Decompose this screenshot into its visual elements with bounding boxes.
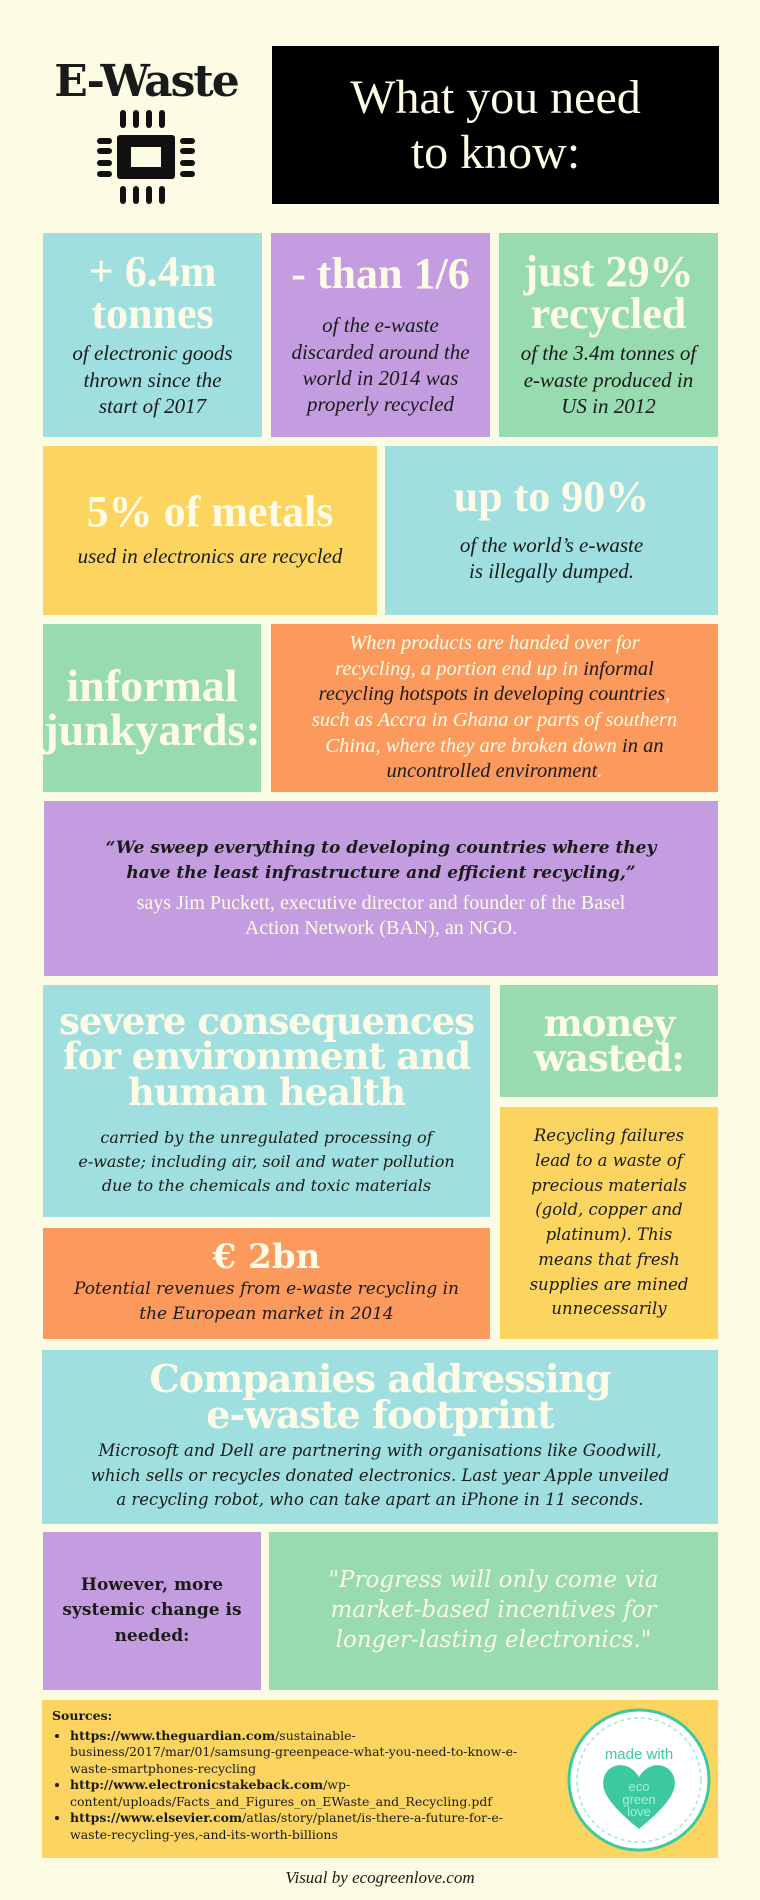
- heading: What you need to know: to know:: [411, 126, 580, 179]
- panel: just 29% recycled: e-waste produced in: [524, 368, 693, 392]
- panel: 6.4m tonnes: + 6.4m: [89, 247, 216, 296]
- panel: 5% of metals: [43, 446, 377, 615]
- logo: made with ecogreenlove: love: [627, 1804, 651, 1819]
- panel: up to 90%: [385, 446, 718, 615]
- logo: made with ecogreenlove: made with: [605, 1746, 673, 1763]
- panel: severe consequences: human health: [128, 1070, 405, 1114]
- panel: recycling failures: [500, 1107, 718, 1339]
- panel: informal junkyards text: China, where they are broken down in an: [325, 735, 664, 757]
- panel: informal junkyards text: such as Accra in Ghana or parts of southern: [312, 709, 677, 731]
- panel: companies addressing e-waste: a recycling robot, who can take apart an iPhone in 11 seconds.: [116, 1490, 644, 1509]
- panel: 2bn revenues: the European market in 2014: [139, 1304, 394, 1324]
- panel: just 29% recycled: recycled: [531, 289, 686, 338]
- panel: systemic change: However, more: [81, 1575, 223, 1595]
- panel: money wasted heading: wasted:: [534, 1036, 684, 1080]
- panel: companies addressing e-waste: Microsoft and Dell are partnering with organisations like Goodwill,: [98, 1441, 662, 1460]
- panel: Jim Puckett quote: says Jim Puckett, executive director and founder of the Basel: [137, 892, 625, 914]
- heading: What you need to know: What you need: [350, 71, 641, 124]
- panel: severe consequences: severe consequences: [59, 999, 474, 1043]
- panel: 6.4m tonnes: start of 2017: [99, 394, 206, 418]
- panel: informal junkyards text: When products are handed over for: [349, 632, 640, 654]
- panel: just 29% recycled: US in 2012: [561, 394, 656, 418]
- panel: progress quote: [269, 1532, 718, 1690]
- panel: just 29% recycled: [499, 233, 718, 437]
- panel: informal junkyards heading: informal: [66, 660, 238, 711]
- panel: informal junkyards text: uncontrolled environment.: [387, 760, 602, 782]
- panel: recycling failures: lead to a waste of: [535, 1151, 683, 1170]
- panel: companies addressing e-waste: e-waste footprint: [206, 1392, 554, 1437]
- logo: made with ecogreenlove: eco: [629, 1779, 649, 1794]
- footer credit: Visual by ecogreenlove.com: [285, 1868, 475, 1887]
- panel: companies addressing e-waste: which sells or recycles donated electronics. Last year Apple unveiled: [91, 1466, 669, 1485]
- panel: less than 1/6: of the e-waste: [322, 313, 439, 337]
- panel: 6.4m tonnes: tonnes: [91, 289, 214, 338]
- panel: 2bn revenues: € 2bn: [213, 1237, 320, 1277]
- panel: Jim Puckett quote: [44, 801, 718, 976]
- panel: 6.4m tonnes: [43, 233, 262, 437]
- panel: recycling failures: means that fresh: [538, 1250, 680, 1269]
- panel: progress quote: longer-lasting electronics.": [336, 1627, 651, 1653]
- panel: severe consequences: e-waste; including air, soil and water pollution: [78, 1152, 455, 1171]
- panel: less than 1/6: discarded around the: [291, 340, 470, 364]
- panel: progress quote: "Progress will only come via: [328, 1567, 659, 1593]
- icon: microchip: [97, 110, 195, 204]
- panel: informal junkyards text: [271, 624, 718, 792]
- panel: Jim Puckett quote: Action Network (BAN), an NGO.: [245, 917, 517, 939]
- panel: 5% of metals: used in electronics are recycled: [78, 544, 342, 568]
- panel: systemic change: systemic change is: [62, 1600, 242, 1620]
- panel: recycling failures: (gold, copper and: [535, 1200, 683, 1219]
- panel: up to 90%: up to 90%: [454, 472, 649, 521]
- logo: made with ecogreenlove: [568, 1708, 710, 1852]
- panel: 2bn revenues: Potential revenues from e-waste recycling in: [74, 1279, 459, 1299]
- panel: informal junkyards text: recycling hotspots in developing countries,: [319, 683, 670, 705]
- panel: less than 1/6: [271, 233, 490, 437]
- panel: money wasted heading: money: [544, 1001, 674, 1045]
- panel: up to 90%: of the world’s e-waste: [460, 533, 643, 557]
- panel: companies addressing e-waste: Companies addressing: [149, 1356, 611, 1401]
- panel: systemic change: needed:: [115, 1626, 189, 1646]
- panel: severe consequences: for environment and: [63, 1034, 470, 1078]
- panel: severe consequences: [43, 985, 490, 1217]
- panel: 5% of metals: 5% of metals: [87, 487, 333, 536]
- panel: informal junkyards heading: [43, 624, 261, 792]
- panel: up to 90%: is illegally dumped.: [469, 559, 634, 583]
- panel: informal junkyards heading: junkyards:: [43, 704, 261, 755]
- title: E-Waste: E-Waste: [54, 56, 238, 107]
- panel: recycling failures: platinum). This: [546, 1225, 672, 1244]
- text: sources list: http://www.electronicstakeback.com/wp-content/uploads/Facts_and_Figures_on_EWaste_and_Recycling.pdf: [70, 1777, 492, 1808]
- panel: less than 1/6: world in 2014 was: [303, 366, 458, 390]
- panel: progress quote: market-based incentives for: [330, 1597, 657, 1623]
- panel: informal junkyards text: recycling, a portion end up in informal: [335, 658, 654, 680]
- text: sources list: Sources:: [52, 1708, 112, 1723]
- panel: systemic change: [43, 1532, 261, 1690]
- panel: recycling failures: unnecessarily: [551, 1299, 667, 1318]
- heading: What you need to know: [272, 46, 719, 204]
- panel: 6.4m tonnes: thrown since the: [83, 368, 222, 392]
- panel: just 29% recycled: just 29%: [524, 247, 693, 296]
- text: sources list: https://www.theguardian.com/sustainable-business/2017/mar/01/samsung-greenpeace-what-you-need-to-know-e-waste-smartphones-recycling: [70, 1728, 517, 1776]
- text: sources list: [52, 1708, 517, 1842]
- panel: recycling failures: precious materials: [531, 1176, 687, 1194]
- panel: less than 1/6: properly recycled: [307, 392, 454, 416]
- panel: less than 1/6: - than 1/6: [291, 249, 470, 298]
- panel: Jim Puckett quote: have the least infrastructure and efficient recycling,”: [126, 862, 636, 882]
- panel: money wasted heading: [500, 985, 718, 1097]
- panel: sources: [42, 1700, 718, 1858]
- panel: just 29% recycled: of the 3.4m tonnes of: [521, 341, 696, 365]
- panel: companies addressing e-waste: [42, 1350, 718, 1524]
- text: sources list: https://www.elsevier.com/atlas/story/planet/is-there-a-future-for-e-waste-recycling-yes,-and-its-worth-billions: [70, 1810, 503, 1842]
- panel: severe consequences: due to the chemicals and toxic materials: [102, 1176, 431, 1195]
- panel: recycling failures: supplies are mined: [530, 1274, 688, 1294]
- panel: severe consequences: carried by the unregulated processing of: [100, 1128, 433, 1147]
- panel: Jim Puckett quote: “We sweep everything to developing countries where they: [106, 838, 656, 858]
- logo: made with ecogreenlove: green: [622, 1792, 656, 1807]
- panel: recycling failures: Recycling failures: [534, 1126, 684, 1145]
- panel: 2bn revenues: [43, 1228, 490, 1339]
- panel: 6.4m tonnes: of electronic goods: [72, 341, 233, 365]
